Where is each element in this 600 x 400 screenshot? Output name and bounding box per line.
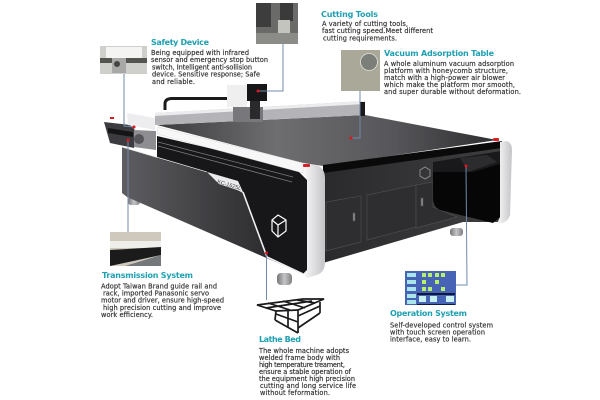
text: cutting tools: Cutting Tools [321, 10, 378, 19]
text: lathe bed [258, 335, 356, 397]
text: lathe bed: the equipment high precision [259, 375, 355, 383]
left white corner post [303, 163, 325, 278]
text: safety device: switch, Intelligent anti-sollision [152, 64, 252, 72]
text: cutting tools [321, 10, 433, 42]
text: safety device: and reliable. [152, 78, 195, 86]
black front band [323, 141, 502, 173]
text: vacuum adsorption table: and super durable without deformation. [384, 88, 521, 96]
text: lathe bed: The whole machine adopts [258, 347, 350, 355]
text: vacuum adsorption table [384, 49, 521, 96]
hexagon logo [272, 215, 286, 237]
table surface [157, 115, 497, 166]
text: lathe bed: without feformation. [260, 389, 330, 397]
text: cutting tools: fast cutting speed.Meet different [322, 27, 433, 35]
text: cutting tools: A variety of cutting tools, [322, 20, 408, 28]
black end panel [157, 136, 307, 274]
rail left end [104, 122, 135, 148]
text: safety device [151, 38, 268, 86]
text: vacuum adsorption table: A whole aluminum vacuum adsorption [384, 60, 514, 68]
text: safety device: Safety Device [151, 38, 210, 47]
text: transmission system: work efficiency. [101, 311, 153, 319]
text: transmission system: motor and driver, ensure high-speed [101, 296, 224, 304]
brand mark [420, 167, 430, 179]
text: lathe bed: high temperature treament, [259, 361, 345, 369]
cutting head [227, 84, 267, 122]
gantry end housing [127, 113, 155, 130]
text: transmission system: Adopt Taiwan Brand guide rail and [101, 282, 217, 290]
cabinet doors [326, 182, 457, 251]
cutting machine [104, 84, 512, 285]
cable chain [165, 98, 228, 110]
text: lathe bed: ensure a stable operation of [259, 368, 352, 376]
text: lathe bed: cutting and long service life [260, 382, 356, 390]
text: operation system: Self-developed control system [390, 322, 493, 330]
text: vacuum adsorption table: Vacuum Adsorption Table [384, 49, 495, 58]
red dots [126, 90, 468, 254]
model badge strip: KC-1625L [216, 179, 242, 192]
feet [128, 197, 463, 285]
callout lines [124, 44, 467, 300]
text: operation system: with touch screen operation [390, 328, 485, 336]
text: vacuum adsorption table: match with a high-power air blower [384, 74, 505, 82]
photo: operation system screen [405, 271, 456, 305]
photo: safety device [100, 46, 147, 74]
text: operation system: interface, easy to learn. [390, 336, 471, 344]
text: transmission system: high precision cutting and improve [103, 304, 221, 312]
gantry beam [155, 101, 365, 125]
text: operation system [390, 309, 493, 344]
photo: transmission [110, 232, 161, 266]
text: safety device: sensor and emergency stop button [151, 56, 268, 64]
text: cutting tools: cutting requirements. [323, 34, 397, 42]
photo: cutting tools [256, 3, 298, 44]
right side panel [323, 147, 502, 263]
model badge strip [122, 147, 303, 274]
white rail strip [157, 127, 303, 173]
right opening with control panel [433, 150, 507, 223]
text: vacuum adsorption table: which make the platform mor smooth, [384, 81, 515, 89]
text: transmission system [101, 271, 224, 319]
text: lathe bed: welded frame body with [259, 354, 340, 362]
text: transmission system: Transmission System [102, 271, 193, 280]
text: vacuum adsorption table: platform with honeycomb structure, [384, 67, 508, 75]
guide rail lines [158, 142, 293, 182]
text: lathe bed: Lathe Bed [259, 335, 301, 344]
right white post [497, 141, 512, 224]
red stop buttons [110, 117, 499, 167]
lathe bed frame [257, 299, 324, 333]
text: safety device: Being equipped with infrared [151, 49, 249, 57]
text: safety device: device. Sensitive response; Safe [152, 70, 260, 78]
photo: vacuum table [341, 50, 380, 91]
text: operation system: Operation System [390, 309, 467, 318]
text: transmission system: rack, imported Panasonic servo [103, 290, 209, 298]
left side panel [122, 147, 303, 274]
